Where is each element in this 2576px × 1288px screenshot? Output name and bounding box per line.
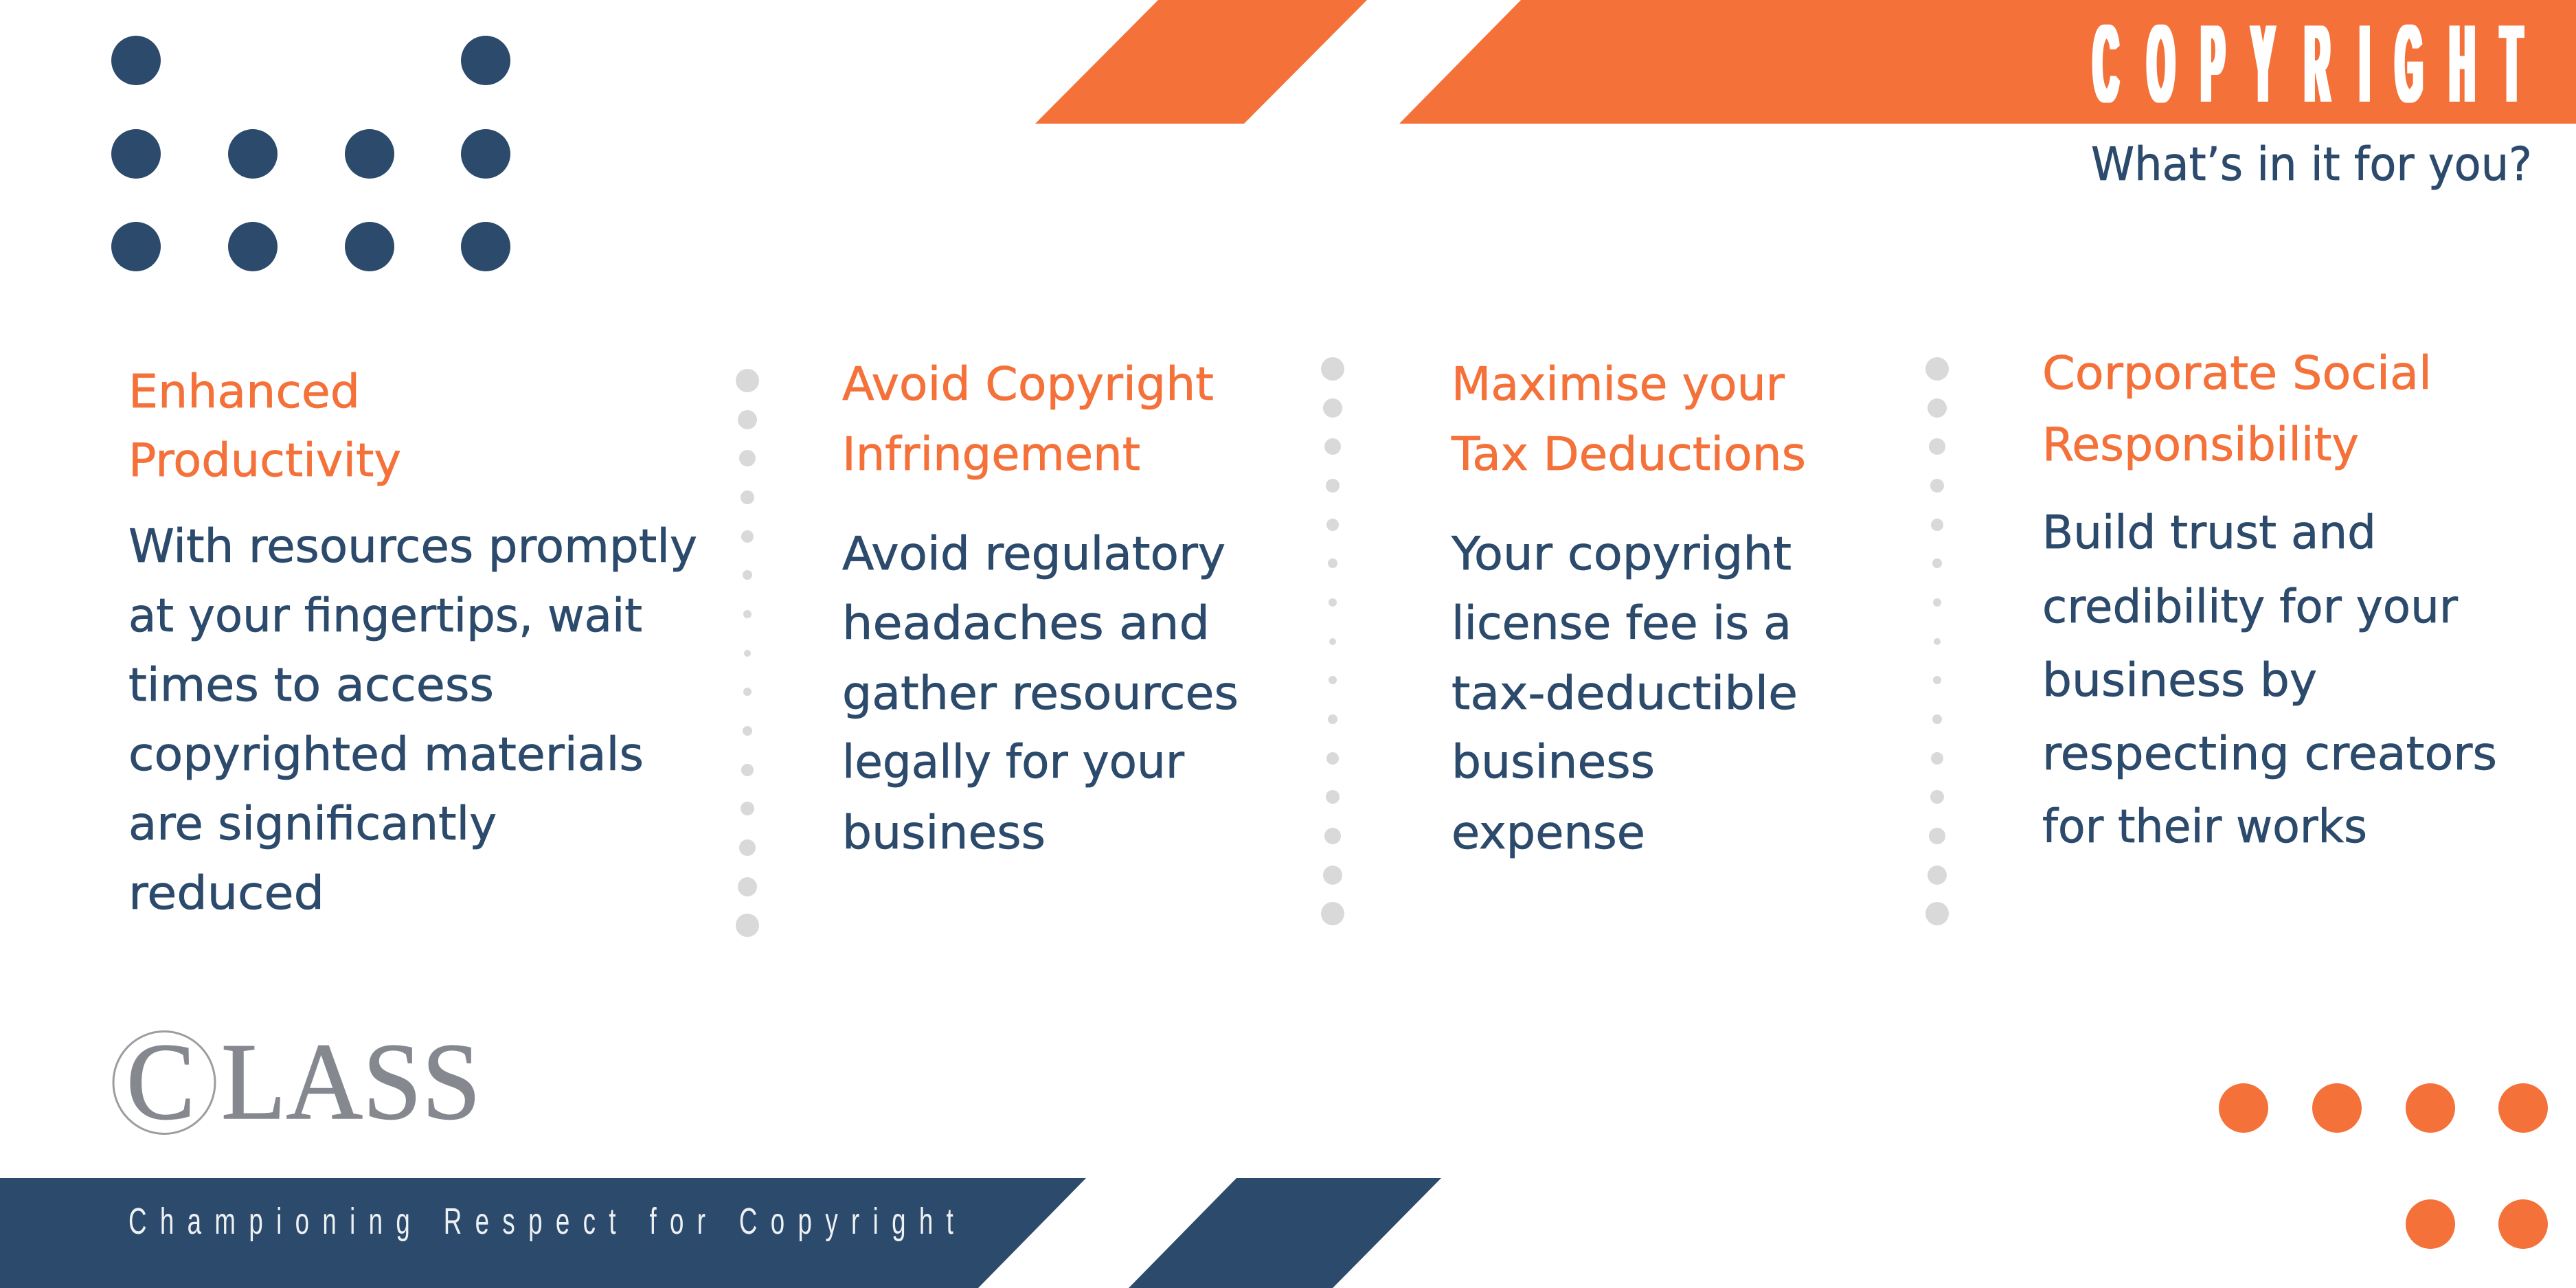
body text: avoid copyright infringement: headaches and xyxy=(842,596,1210,650)
body text: enhanced productivity: times to access xyxy=(128,658,494,712)
heading: maximise your tax deductions xyxy=(1451,357,1806,481)
heading: avoid copyright infringement: Infringement xyxy=(842,427,1140,481)
body text: avoid copyright infringement: gather resources xyxy=(842,666,1239,720)
body text: avoid copyright infringement: business xyxy=(842,806,1046,859)
panel: maximise your tax deductions xyxy=(1451,357,1806,859)
body text: corporate social responsibility: business by xyxy=(2042,653,2317,707)
body text: enhanced productivity: reduced xyxy=(128,866,324,920)
logo: CLASS: LASS xyxy=(221,1020,481,1142)
logo: CLASS xyxy=(113,1020,481,1142)
body text: corporate social responsibility: credibility for your xyxy=(2042,580,2458,633)
body text: corporate social responsibility: Build trust and xyxy=(2042,506,2376,559)
heading: enhanced productivity: Productivity xyxy=(128,433,401,487)
heading: corporate social responsibility xyxy=(2042,346,2432,471)
logo: CLASS: C xyxy=(126,1020,195,1142)
body text: enhanced productivity: at your fingertips, wait xyxy=(128,589,642,642)
decorative navy dot grid xyxy=(111,36,510,271)
body text: maximise your tax deductions: Your copyright xyxy=(1451,527,1792,580)
heading: maximise your tax deductions: Tax Deductions xyxy=(1451,427,1806,481)
body text: enhanced productivity: With resources promptly xyxy=(128,519,697,573)
body text: corporate social responsibility xyxy=(2042,506,2497,853)
body text: maximise your tax deductions: business xyxy=(1451,735,1655,789)
bottom navy banner stripes xyxy=(0,1178,1441,1288)
body text: maximise your tax deductions: expense xyxy=(1451,806,1645,859)
body text: enhanced productivity xyxy=(128,519,697,920)
decorative orange dot grid xyxy=(2219,1083,2548,1249)
body text: maximise your tax deductions: tax-deductible xyxy=(1451,666,1798,720)
heading: corporate social responsibility: Corporate Social xyxy=(2042,346,2432,400)
body text: maximise your tax deductions: license fee is a xyxy=(1451,596,1792,650)
dotted divider 1 xyxy=(736,369,759,937)
top orange banner stripes xyxy=(1035,0,2576,124)
panel: corporate social responsibility xyxy=(2042,346,2497,853)
body text: corporate social responsibility: for their works xyxy=(2042,800,2367,853)
body text: avoid copyright infringement: Avoid regulatory xyxy=(842,527,1225,580)
heading: enhanced productivity xyxy=(128,365,401,487)
heading: avoid copyright infringement: Avoid Copyright xyxy=(842,357,1214,411)
heading: avoid copyright infringement xyxy=(842,357,1214,481)
panel: avoid copyright infringement xyxy=(842,357,1239,859)
body text: avoid copyright infringement: legally for your xyxy=(842,735,1184,789)
panel: enhanced productivity xyxy=(128,365,697,920)
heading: maximise your tax deductions: Maximise your xyxy=(1451,357,1785,411)
body text: enhanced productivity: copyrighted materials xyxy=(128,727,644,781)
heading: enhanced productivity: Enhanced xyxy=(128,365,360,418)
heading: corporate social responsibility: Responsibility xyxy=(2042,418,2359,471)
body text: enhanced productivity: are significantly xyxy=(128,797,497,850)
dotted divider 2 xyxy=(1321,357,1344,925)
body text: corporate social responsibility: respecting creators xyxy=(2042,727,2497,780)
body text: maximise your tax deductions xyxy=(1451,527,1798,859)
tagline: Championing Respect for Copyright xyxy=(128,1200,953,1242)
title: COPYRIGHT xyxy=(2094,2,2522,126)
subtitle: What’s in it for you? xyxy=(2091,137,2532,191)
body text: avoid copyright infringement xyxy=(842,527,1239,859)
dotted divider 3 xyxy=(1925,357,1949,925)
